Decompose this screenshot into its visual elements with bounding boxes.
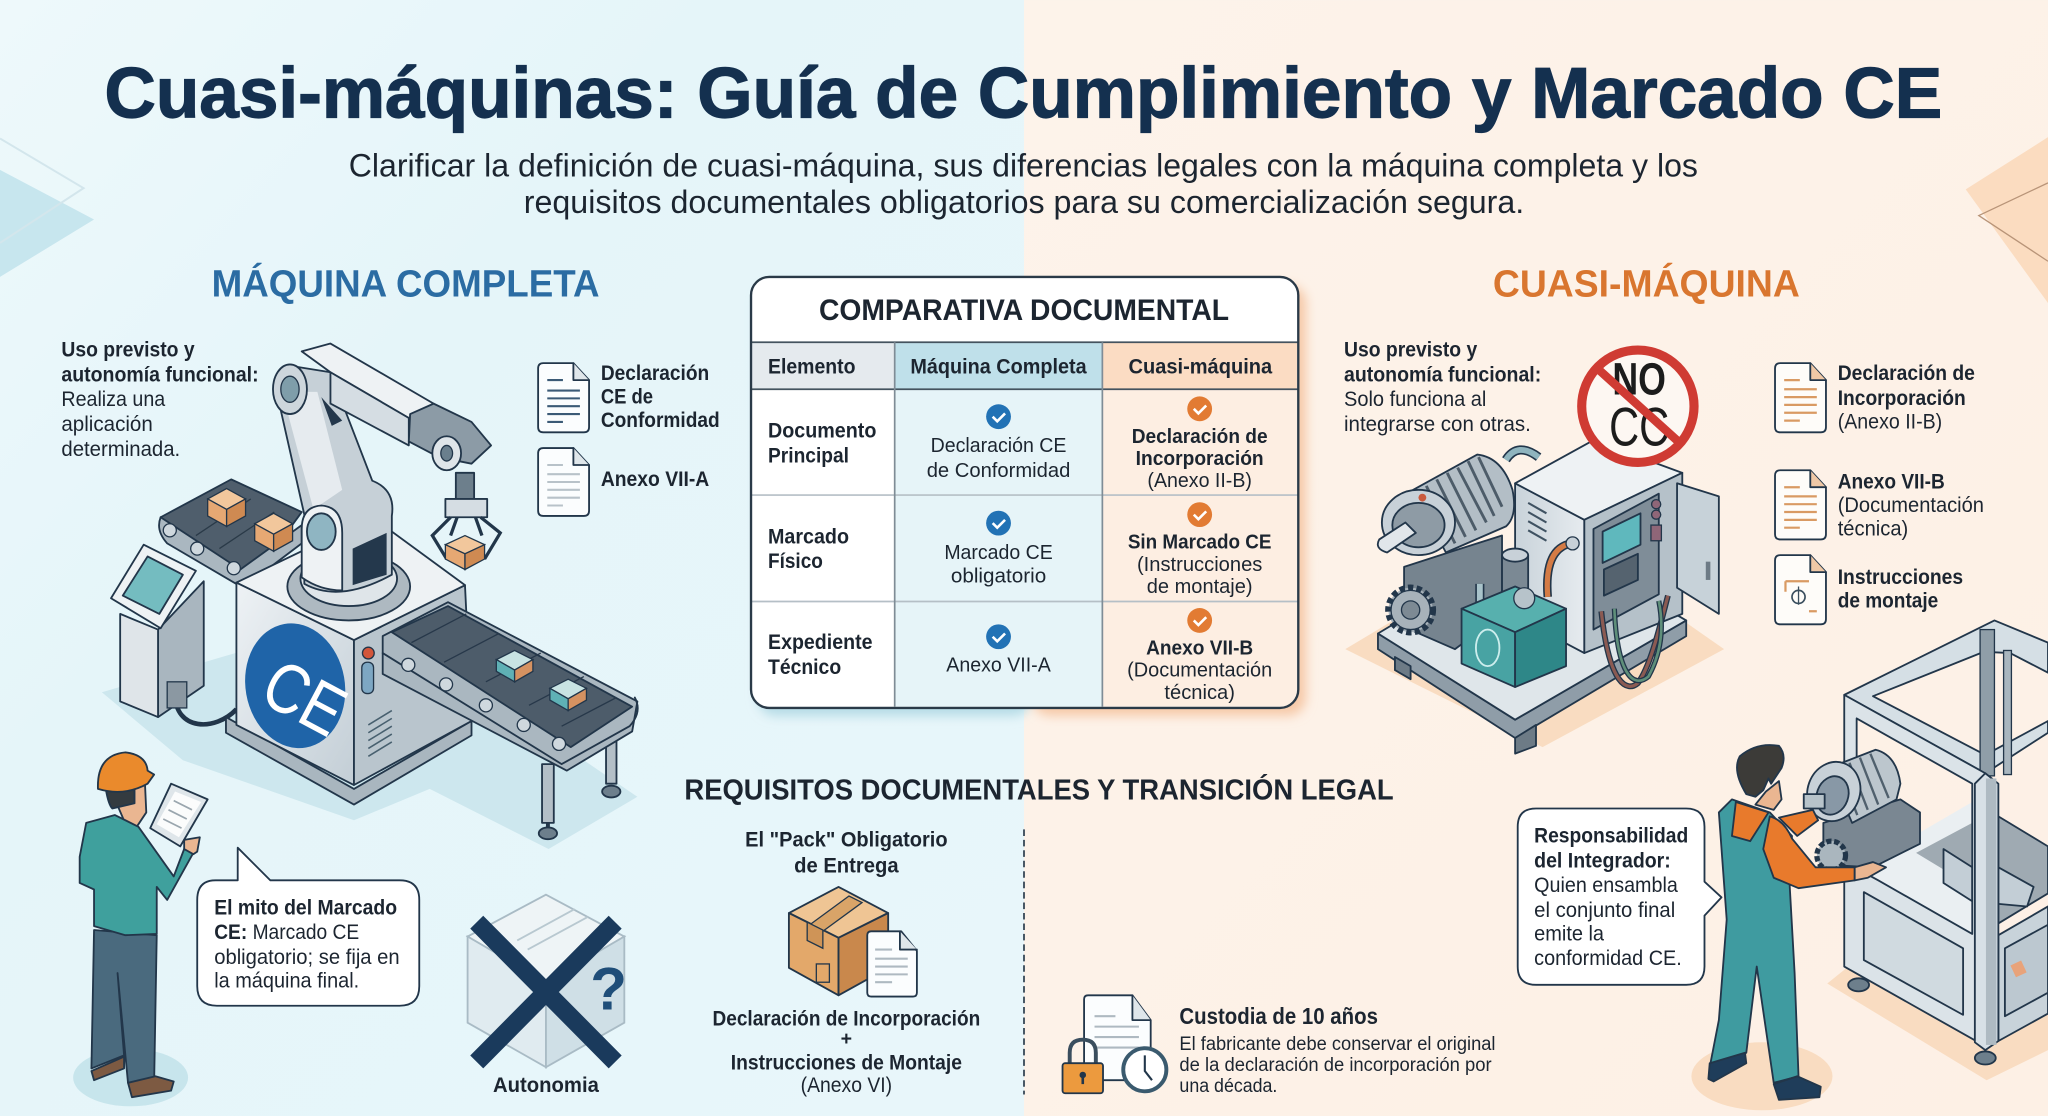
corner post [1975, 773, 1998, 1050]
icon: custodia [1063, 995, 1166, 1093]
callout: responsabilidad del integrador: del Integrador: [1534, 849, 1671, 872]
callout: responsabilidad del integrador: Responsabilidad [1534, 824, 1688, 847]
text block: documentos máquina completa [601, 362, 720, 491]
control cabinet [1515, 440, 1719, 653]
text block: uso previsto, máquina completa: autonomía funcional: [61, 363, 259, 386]
illustration: bastidor máquina final [1827, 620, 2048, 1080]
interior [1998, 816, 2048, 923]
callout: el mito del marcado CE: obligatorio; se fija en [214, 946, 400, 969]
column: máquina completa: Marcado CE [944, 541, 1053, 564]
callout: el mito del marcado CE: El mito del Marcado [214, 896, 397, 919]
text block: documentos cuasi-máquina: (Anexo II-B) [1838, 410, 1942, 433]
table header [768, 356, 1273, 379]
text: custodia de 10 años: Custodia de 10 años [1179, 1003, 1378, 1029]
text: contenido del pack: Instrucciones de Montaje [731, 1050, 962, 1075]
cabinet: CE [250, 644, 359, 751]
column: cuasi-máquina: Sin Marcado CE [1128, 531, 1272, 554]
heading: máquina completa: MÁQUINA COMPLETA [212, 262, 600, 306]
icon: documento declaración CE [538, 363, 589, 432]
row labels [768, 420, 876, 679]
text block: uso previsto, cuasi-máquina: integrarse con otras. [1344, 413, 1531, 436]
cables [1601, 596, 1668, 686]
text block: uso previsto, máquina completa: determinada. [61, 438, 180, 461]
icon: autonomía tachada [468, 895, 627, 1067]
text block: documentos cuasi-máquina: Incorporación [1838, 387, 1966, 410]
head [1755, 781, 1782, 810]
icon: declaración de incorporación [1775, 363, 1826, 432]
icon: autonomía tachada: ? [590, 956, 627, 1023]
text block: documentos cuasi-máquina: (Documentación [1838, 494, 1984, 517]
near arm [1763, 816, 1855, 888]
heading: requisitos documentales: REQUISITOS DOCUMENTALES Y TRANSICIÓN LEGAL [684, 772, 1394, 806]
text block: documentos cuasi-máquina: Instrucciones [1838, 566, 1963, 589]
column: cuasi-máquina: (Documentación [1127, 659, 1272, 682]
back conveyor [159, 479, 302, 588]
text block: documentos máquina completa: Anexo VII-A [601, 468, 709, 491]
column: cuasi-máquina: (Anexo II-B) [1147, 469, 1252, 492]
illustration: cuasi-máquina [1345, 440, 1724, 754]
icon: caja con documento [789, 887, 917, 997]
robot arm [273, 344, 500, 620]
title: Cuasi-máquinas: Guía de Cumplimiento y Marcado CE [104, 54, 1942, 134]
text: custodia de 10 años: El fabricante debe conservar el original [1179, 1034, 1496, 1055]
column: máquina completa: obligatorio [951, 565, 1046, 588]
subtitle [349, 147, 1698, 220]
column: máquina completa: de Conformidad [927, 459, 1070, 482]
text block: uso previsto, cuasi-máquina [1344, 339, 1541, 436]
text: contenido del pack: + [841, 1028, 852, 1050]
text block: documentos máquina completa: Declaración [601, 362, 709, 385]
shadow [102, 614, 637, 849]
text: custodia de 10 años: una década. [1179, 1076, 1277, 1097]
column: cuasi-máquina [1127, 396, 1272, 704]
icon: no CE [1582, 350, 1694, 462]
column: máquina completa [927, 404, 1070, 676]
right lower [1998, 906, 2048, 1041]
subtitle: requisitos documentales obligatorios para su comercialización segura. [524, 184, 1524, 220]
text block: uso previsto, cuasi-máquina: autonomía funcional: [1344, 363, 1541, 386]
text block: uso previsto, cuasi-máquina: Uso previsto y [1344, 339, 1478, 362]
platform [1378, 620, 1686, 738]
text: contenido del pack: Declaración de Incorporación [712, 1005, 980, 1030]
row labels: Principal [768, 444, 849, 467]
table header: Elemento [768, 356, 856, 379]
text: contenido del pack [712, 1005, 980, 1097]
text block: documentos cuasi-máquina: Anexo VII-B [1838, 471, 1945, 494]
column: cuasi-máquina: Incorporación [1136, 447, 1264, 470]
text block: uso previsto, máquina completa: aplicación [61, 413, 153, 436]
machine shadow [1345, 594, 1724, 747]
heading: cuasi-máquina: CUASI-MÁQUINA [1493, 262, 1800, 306]
row labels: Documento [768, 420, 876, 443]
column: cuasi-máquina: Declaración de [1132, 425, 1268, 448]
callout: responsabilidad del integrador [1518, 809, 1721, 985]
far arm [1779, 810, 1818, 836]
callout: responsabilidad del integrador: Quien ensambla [1534, 874, 1678, 897]
text: custodia de 10 años [1179, 1003, 1496, 1097]
label: autonomía: Autonomia [493, 1072, 600, 1097]
panel: comparativa documental [751, 277, 1306, 716]
text block: documentos cuasi-máquina [1838, 362, 1984, 612]
column: cuasi-máquina: Anexo VII-B [1146, 636, 1253, 659]
front conveyor [383, 602, 638, 839]
row labels: Físico [768, 550, 823, 573]
gearbox and motor [1823, 799, 1920, 867]
back posts and top ring [1873, 652, 2048, 773]
text block: uso previsto, cuasi-máquina: Solo funciona al [1344, 388, 1486, 411]
text: custodia de 10 años: de la declaración de incorporación por [1179, 1055, 1492, 1076]
icon: no CE: NO [1612, 353, 1666, 404]
illustration: máquina completa [102, 344, 638, 849]
callout: el mito del marcado CE [197, 848, 419, 1006]
text: el pack obligatorio: El "Pack" Obligatorio [745, 826, 948, 851]
text block: uso previsto, máquina completa: Uso previsto y [61, 339, 195, 362]
text block: uso previsto, máquina completa: Realiza una [61, 388, 166, 411]
text block: documentos cuasi-máquina: Declaración de [1838, 362, 1975, 385]
motor and gearbox [1378, 450, 1539, 649]
callout: el mito del marcado CE: la máquina final. [214, 969, 359, 992]
icon: anexo VII-B [1775, 470, 1826, 539]
text: el pack obligatorio [745, 826, 948, 878]
callout: el mito del marcado CE: CE: Marcado CE [214, 921, 359, 944]
subtitle: Clarificar la definición de cuasi-máquina, sus diferencias legales con la máquina completa y los [349, 147, 1698, 183]
text: el pack obligatorio: de Entrega [794, 853, 900, 878]
table header: Cuasi-máquina [1128, 356, 1273, 379]
icon: instrucciones de montaje [1775, 555, 1826, 624]
row labels: Expediente [768, 631, 872, 654]
left face [1844, 695, 1985, 1046]
illustration: integrador con motor [1691, 745, 1920, 1110]
control kiosk [111, 545, 236, 724]
illustration: worker with clipboard [73, 752, 208, 1106]
divider dashed [1023, 829, 1025, 1095]
column: cuasi-máquina: técnica) [1164, 681, 1235, 704]
row labels: Marcado [768, 525, 849, 548]
text block: documentos máquina completa: CE de [601, 386, 653, 409]
column: máquina completa: Declaración CE [931, 434, 1066, 457]
text block: documentos cuasi-máquina: de montaje [1838, 589, 1938, 612]
row labels: Técnico [768, 656, 841, 679]
text block: uso previsto, máquina completa [61, 339, 259, 461]
text: contenido del pack: (Anexo VI) [801, 1074, 892, 1097]
table title: COMPARATIVA DOCUMENTAL [819, 294, 1229, 327]
text block: documentos máquina completa: Conformidad [601, 409, 720, 432]
callout: responsabilidad del integrador: emite la [1534, 922, 1604, 945]
overalls [1710, 799, 1799, 1083]
callout: responsabilidad del integrador: conformidad CE. [1534, 947, 1682, 970]
icon: no CE: CC [1609, 395, 1669, 457]
column: cuasi-máquina: (Instrucciones [1137, 553, 1262, 576]
column: cuasi-máquina: de montaje) [1147, 575, 1253, 598]
column: máquina completa: Anexo VII-A [946, 653, 1051, 676]
icon: documento anexo VII-A [538, 448, 589, 516]
callout: responsabilidad del integrador: el conjunto final [1534, 899, 1675, 922]
text block: documentos cuasi-máquina: técnica) [1838, 518, 1908, 541]
hydraulic tank [1462, 549, 1566, 687]
cabinet [226, 517, 472, 805]
table header: Máquina Completa [910, 356, 1087, 379]
